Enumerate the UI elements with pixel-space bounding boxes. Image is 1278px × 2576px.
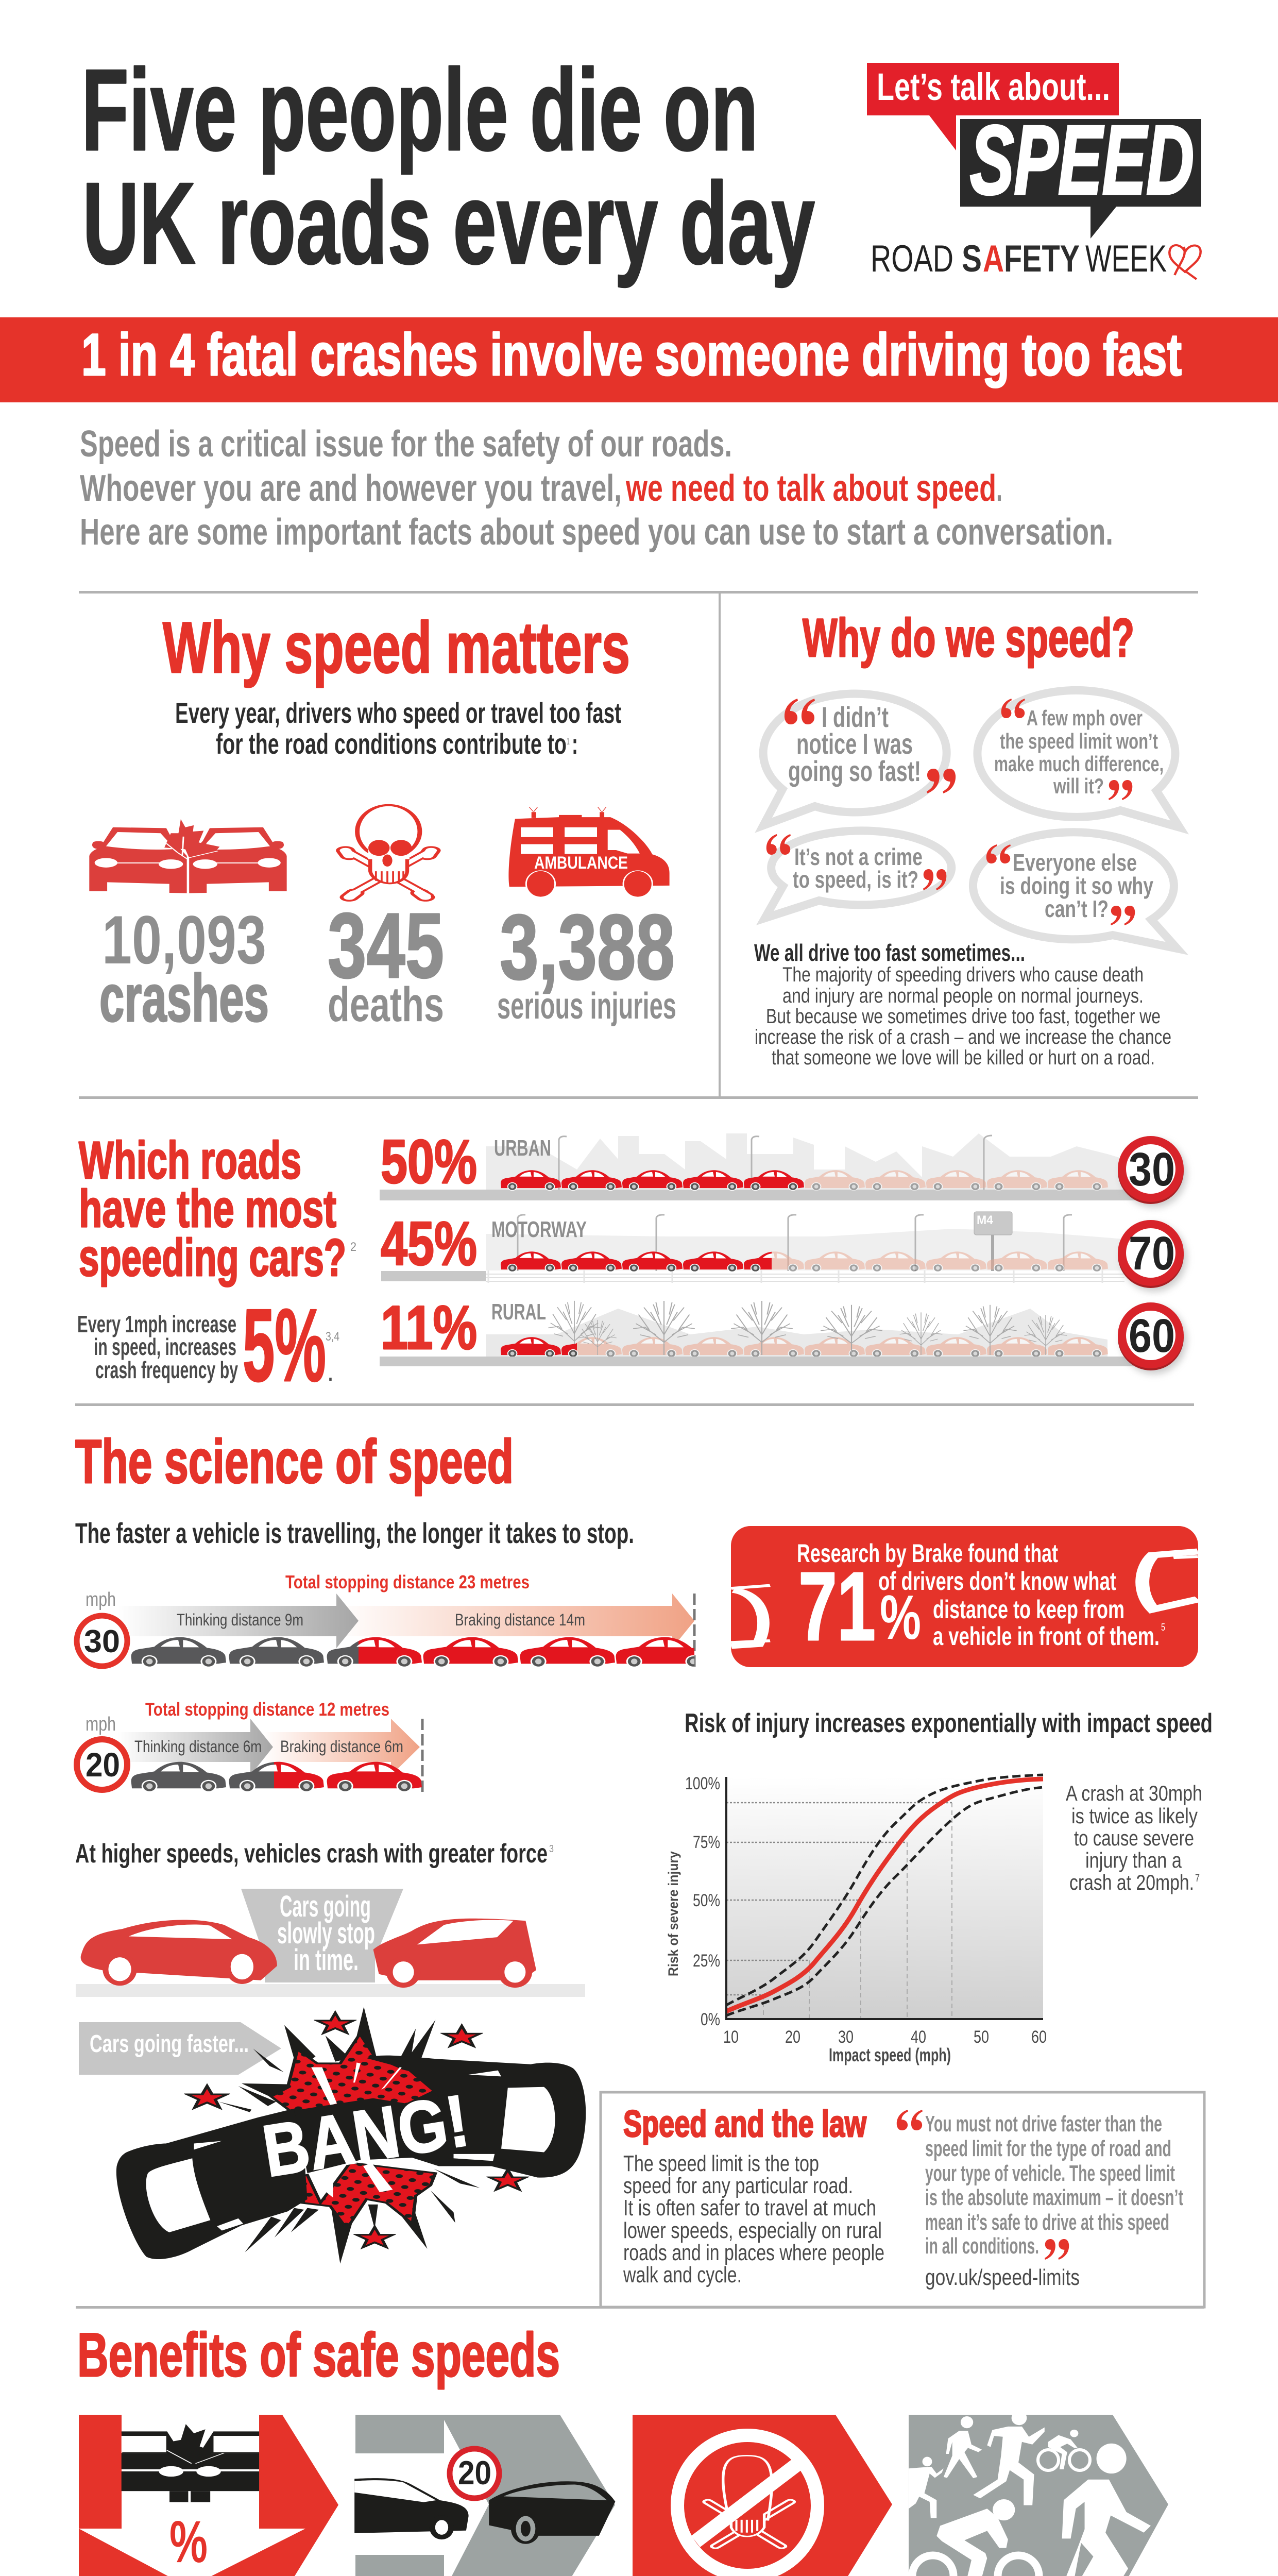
diagram: stopping distance at 20mph: 20	[86, 1745, 120, 1784]
subheading: for the road conditions contribute to	[216, 727, 567, 760]
callout: research by Brake 71 percent: Research by Brake found that	[797, 1539, 1058, 1568]
text: crash at 30mph vs 20mph: is twice as likely	[1071, 1804, 1198, 1828]
tile: more people walk and cycle	[909, 2411, 1168, 2576]
intro text: Whoever you are and however you travel,	[80, 468, 622, 509]
text: crash at 30mph vs 20mph: A crash at 30mph	[1066, 1781, 1202, 1805]
text: crash at 30mph vs 20mph: to cause severe	[1074, 1826, 1194, 1850]
subheading: 1	[567, 736, 570, 747]
intro text: .	[996, 468, 1002, 509]
tile: fewer crashes	[79, 2415, 338, 2576]
stat: deaths	[328, 894, 444, 1032]
quote: gov.uk/speed-limits	[925, 2265, 1080, 2290]
callout: research by Brake 71 percent: a vehicle in front of them.	[933, 1622, 1160, 1651]
illustration: cars going slowly stop in time: slowly stop	[277, 1917, 375, 1950]
quote: in all conditions.	[925, 2233, 1039, 2259]
road row: motorway: MOTORWAY	[491, 1217, 587, 1242]
stat: crashes: crashes	[99, 960, 269, 1036]
stat: serious injuries: 3,388	[500, 895, 675, 998]
road row: motorway: 45%	[381, 1209, 477, 1278]
speech bubble 4	[973, 832, 1177, 948]
text: we all drive too fast sometimes: and injury are normal people on normal journeys.	[782, 985, 1144, 1007]
diagram: stopping distance at 30mph: Braking distance 14m	[455, 1611, 585, 1629]
intro text: Speed is a critical issue for the safety of our roads.	[80, 423, 732, 465]
heading	[79, 1131, 356, 1287]
stat: crashes: 10,093	[102, 902, 266, 978]
diagram: stopping distance at 30mph: Thinking distance 9m	[177, 1611, 303, 1629]
logo: Let's talk about speed, Road Safety Week: S	[962, 238, 982, 280]
label arrow: cars going faster	[79, 2022, 281, 2075]
text: crash at 30mph vs 20mph: crash at 20mph.	[1069, 1870, 1194, 1894]
logo: Let's talk about speed, Road Safety Week	[867, 63, 1201, 280]
subheading: stopping distance: The faster a vehicle is travelling, the longer it takes to stop.	[75, 1517, 634, 1549]
text: we all drive too fast sometimes: But because we sometimes drive too fast, together we	[766, 1005, 1161, 1028]
heading: Why do we speed?	[803, 608, 1134, 668]
stat: 5 percent crash frequency: 5%	[243, 1288, 326, 1403]
body text: speed for any particular road.	[623, 2173, 853, 2198]
stat: 5 percent crash frequency	[77, 1288, 339, 1403]
body text: roads and in places where people	[623, 2240, 884, 2265]
speed sign: 70	[1118, 1220, 1187, 1292]
subheading	[175, 697, 621, 760]
title: Five people die on	[81, 45, 758, 175]
speech bubble 2	[977, 690, 1180, 827]
heading: have the most	[79, 1179, 336, 1238]
heading: benefits of safe speeds: Benefits of safe speeds	[77, 2320, 560, 2389]
callout: research by Brake 71 percent: 5	[1161, 1622, 1165, 1633]
body text: walk and cycle.	[623, 2262, 742, 2287]
chart: risk of severe injury by impact speed: 75%	[693, 1833, 720, 1852]
diagram: stopping distance at 20mph: mph	[86, 1714, 116, 1735]
text: we all drive too fast sometimes	[754, 939, 1171, 1069]
chart: risk of severe injury by impact speed: 100%	[685, 1774, 720, 1793]
callout: research by Brake 71 percent: of drivers don’t know what	[878, 1567, 1116, 1596]
logo: Let's talk about speed, Road Safety Week: A	[983, 238, 1004, 280]
title: UK roads every day	[82, 158, 815, 288]
panel: speed and the law	[601, 2092, 1204, 2307]
heading: Which roads	[79, 1131, 301, 1190]
chart: risk of severe injury by impact speed: Risk of severe injury	[666, 1851, 681, 1976]
road row: urban: 50%	[381, 1127, 477, 1196]
speech bubble 4: Everyone else	[1013, 849, 1137, 876]
speed sign: 70: 70	[1129, 1227, 1175, 1280]
intro text	[80, 423, 1113, 553]
text: crash at 30mph vs 20mph: injury than a	[1085, 1848, 1182, 1872]
body text	[623, 2151, 884, 2287]
speed sign: 30: 30	[1129, 1143, 1175, 1196]
tile: less impact: 20	[458, 2454, 491, 2492]
stat: 5 percent crash frequency: in speed, increases	[94, 1333, 236, 1360]
subheading: greater force: At higher speeds, vehicles crash with greater force	[75, 1839, 548, 1869]
chart: risk of severe injury by impact speed	[666, 1708, 1213, 2065]
tile: fewer crashes: %	[169, 2509, 208, 2575]
chart: risk of severe injury by impact speed: Impact speed (mph)	[829, 2044, 951, 2065]
speech bubble 3	[765, 831, 951, 918]
text: we all drive too fast sometimes: We all drive too fast sometimes...	[754, 939, 1025, 966]
road row: motorway: M4	[977, 1213, 994, 1227]
text: crash at 30mph vs 20mph: 7	[1195, 1873, 1200, 1884]
chart: risk of severe injury by impact speed: 30	[838, 2027, 854, 2047]
stat: serious injuries	[497, 895, 676, 1027]
quote	[897, 2110, 1183, 2290]
callout: research by Brake 71 percent	[731, 1526, 1198, 1667]
diagram: stopping distance at 30mph: Total stopping distance 23 metres	[285, 1571, 530, 1592]
text: we all drive too fast sometimes: that someone we love will be killed or hurt on a road.	[772, 1046, 1155, 1069]
diagram: stopping distance at 20mph	[77, 1699, 422, 1792]
chart: risk of severe injury by impact speed: 50%	[693, 1891, 720, 1910]
callout: research by Brake 71 percent: distance to keep from	[933, 1595, 1124, 1624]
logo: Let's talk about speed, Road Safety Week: FETY	[1004, 238, 1080, 280]
diagram: stopping distance at 30mph	[77, 1571, 711, 1669]
logo: Let's talk about speed, Road Safety Week: Let’s talk about...	[877, 65, 1110, 108]
intro text: we need to talk about speed	[625, 468, 996, 509]
road row: urban	[380, 1127, 1141, 1200]
stat: 5 percent crash frequency: Every 1mph increase	[77, 1311, 236, 1337]
road row: rural: 11%	[381, 1293, 477, 1362]
text: crash at 30mph vs 20mph	[1066, 1781, 1202, 1894]
text: we all drive too fast sometimes: increase the risk of a crash – and we increase the chance	[755, 1026, 1171, 1048]
subheading: greater force: 3	[549, 1843, 554, 1855]
speech bubble 4: is doing it so why	[1000, 872, 1153, 899]
body text: It is often safer to travel at much	[623, 2195, 876, 2221]
logo: Let's talk about speed, Road Safety Week: ROAD	[871, 238, 953, 280]
chart: risk of severe injury by impact speed: 60	[1031, 2027, 1047, 2047]
diagram: stopping distance at 30mph: 30	[84, 1624, 120, 1659]
body text: The speed limit is the top	[623, 2151, 819, 2176]
diagram: stopping distance at 20mph: Braking distance 6m	[280, 1737, 403, 1756]
chart: risk of severe injury by impact speed: 25%	[693, 1951, 720, 1971]
tile: prevents death and injury	[633, 2415, 892, 2576]
stat: 5 percent crash frequency: .	[328, 1363, 333, 1385]
illustration: BANG crash: BANG!	[258, 2079, 474, 2193]
icon: ambulance: AMBULANCE	[534, 853, 628, 873]
heading: Why speed matters	[163, 607, 630, 688]
road row: urban: URBAN	[494, 1136, 551, 1161]
label arrow: cars going faster: Cars going faster...	[90, 2030, 249, 2058]
subheading: :	[572, 727, 578, 760]
callout: research by Brake 71 percent: %	[880, 1582, 921, 1652]
stat: deaths: deaths	[328, 977, 444, 1032]
road row: rural: RURAL	[491, 1299, 546, 1325]
tile: less impact	[354, 2415, 615, 2576]
stat: 5 percent crash frequency: 3,4	[326, 1330, 339, 1344]
stat: 5 percent crash frequency: crash frequency by	[95, 1357, 238, 1383]
speed sign: 60: 60	[1129, 1310, 1175, 1362]
illustration: cars going slowly stop in time: in time.	[294, 1943, 359, 1977]
title	[81, 45, 815, 288]
panel: which roads have the most speeding cars	[77, 1127, 1187, 1403]
chart: risk of severe injury by impact speed: 10	[723, 2027, 739, 2047]
icon: ambulance	[508, 807, 670, 897]
text: we all drive too fast sometimes: The majority of speeding drivers who cause death	[782, 963, 1144, 986]
heading: 2	[350, 1240, 356, 1254]
diagram: stopping distance at 20mph: Total stopping distance 12 metres	[145, 1699, 389, 1720]
illustration: BANG crash	[116, 2007, 586, 2264]
speech bubble 2: the speed limit won’t	[1000, 729, 1158, 753]
stat: crashes	[99, 902, 269, 1036]
speech bubble 1	[763, 694, 956, 825]
stat: serious injuries: serious injuries	[497, 986, 676, 1027]
logo: Let's talk about speed, Road Safety Week: WEEK	[1085, 238, 1167, 280]
road row: motorway	[381, 1209, 1124, 1283]
heading: speeding cars?	[79, 1228, 346, 1287]
speech bubble 3: It’s not a crime	[794, 843, 923, 870]
speech bubble 1: going so fast!	[788, 755, 921, 787]
speech bubble 1: I didn’t	[822, 701, 889, 733]
speech bubble 1: notice I was	[796, 727, 913, 760]
speech bubble 2: A few mph over	[1027, 706, 1143, 730]
speech bubble 4: can’t I?	[1045, 895, 1109, 922]
body text: lower speeds, especially on rural	[623, 2218, 882, 2243]
illustration: cars going slowly stop in time	[76, 1889, 585, 1997]
icon: crashed cars	[89, 819, 287, 893]
diagram: stopping distance at 30mph: mph	[86, 1589, 116, 1611]
panel: why speed matters	[89, 607, 676, 1036]
chart: risk of severe injury by impact speed: 20	[785, 2027, 800, 2047]
chart: risk of severe injury by impact speed: 40	[911, 2027, 926, 2047]
stat: deaths: 345	[328, 894, 444, 997]
speed sign: 30	[1118, 1136, 1187, 1208]
chart: risk of severe injury by impact speed: 50	[974, 2027, 989, 2047]
speed sign: 60	[1118, 1302, 1187, 1374]
callout: research by Brake 71 percent: 71	[798, 1552, 876, 1661]
subheading: Every year, drivers who speed or travel too fast	[175, 697, 621, 729]
heading: the science of speed: The science of speed	[75, 1427, 514, 1496]
panel: why do we speed	[754, 608, 1180, 1069]
diagram: stopping distance at 20mph: Thinking distance 6m	[134, 1737, 262, 1756]
icon: skull and crossbones	[346, 805, 431, 897]
heading: Speed and the law	[623, 2104, 867, 2145]
chart: risk of severe injury by impact speed: 0%	[701, 2010, 720, 2029]
speech bubble 2: will it?	[1053, 774, 1104, 798]
road row: rural	[380, 1300, 1135, 1366]
speech bubble 2: make much difference,	[994, 752, 1164, 776]
illustration: cars going slowly stop in time: Cars going	[280, 1890, 371, 1923]
speech bubble 3: to speed, is it?	[793, 866, 918, 893]
